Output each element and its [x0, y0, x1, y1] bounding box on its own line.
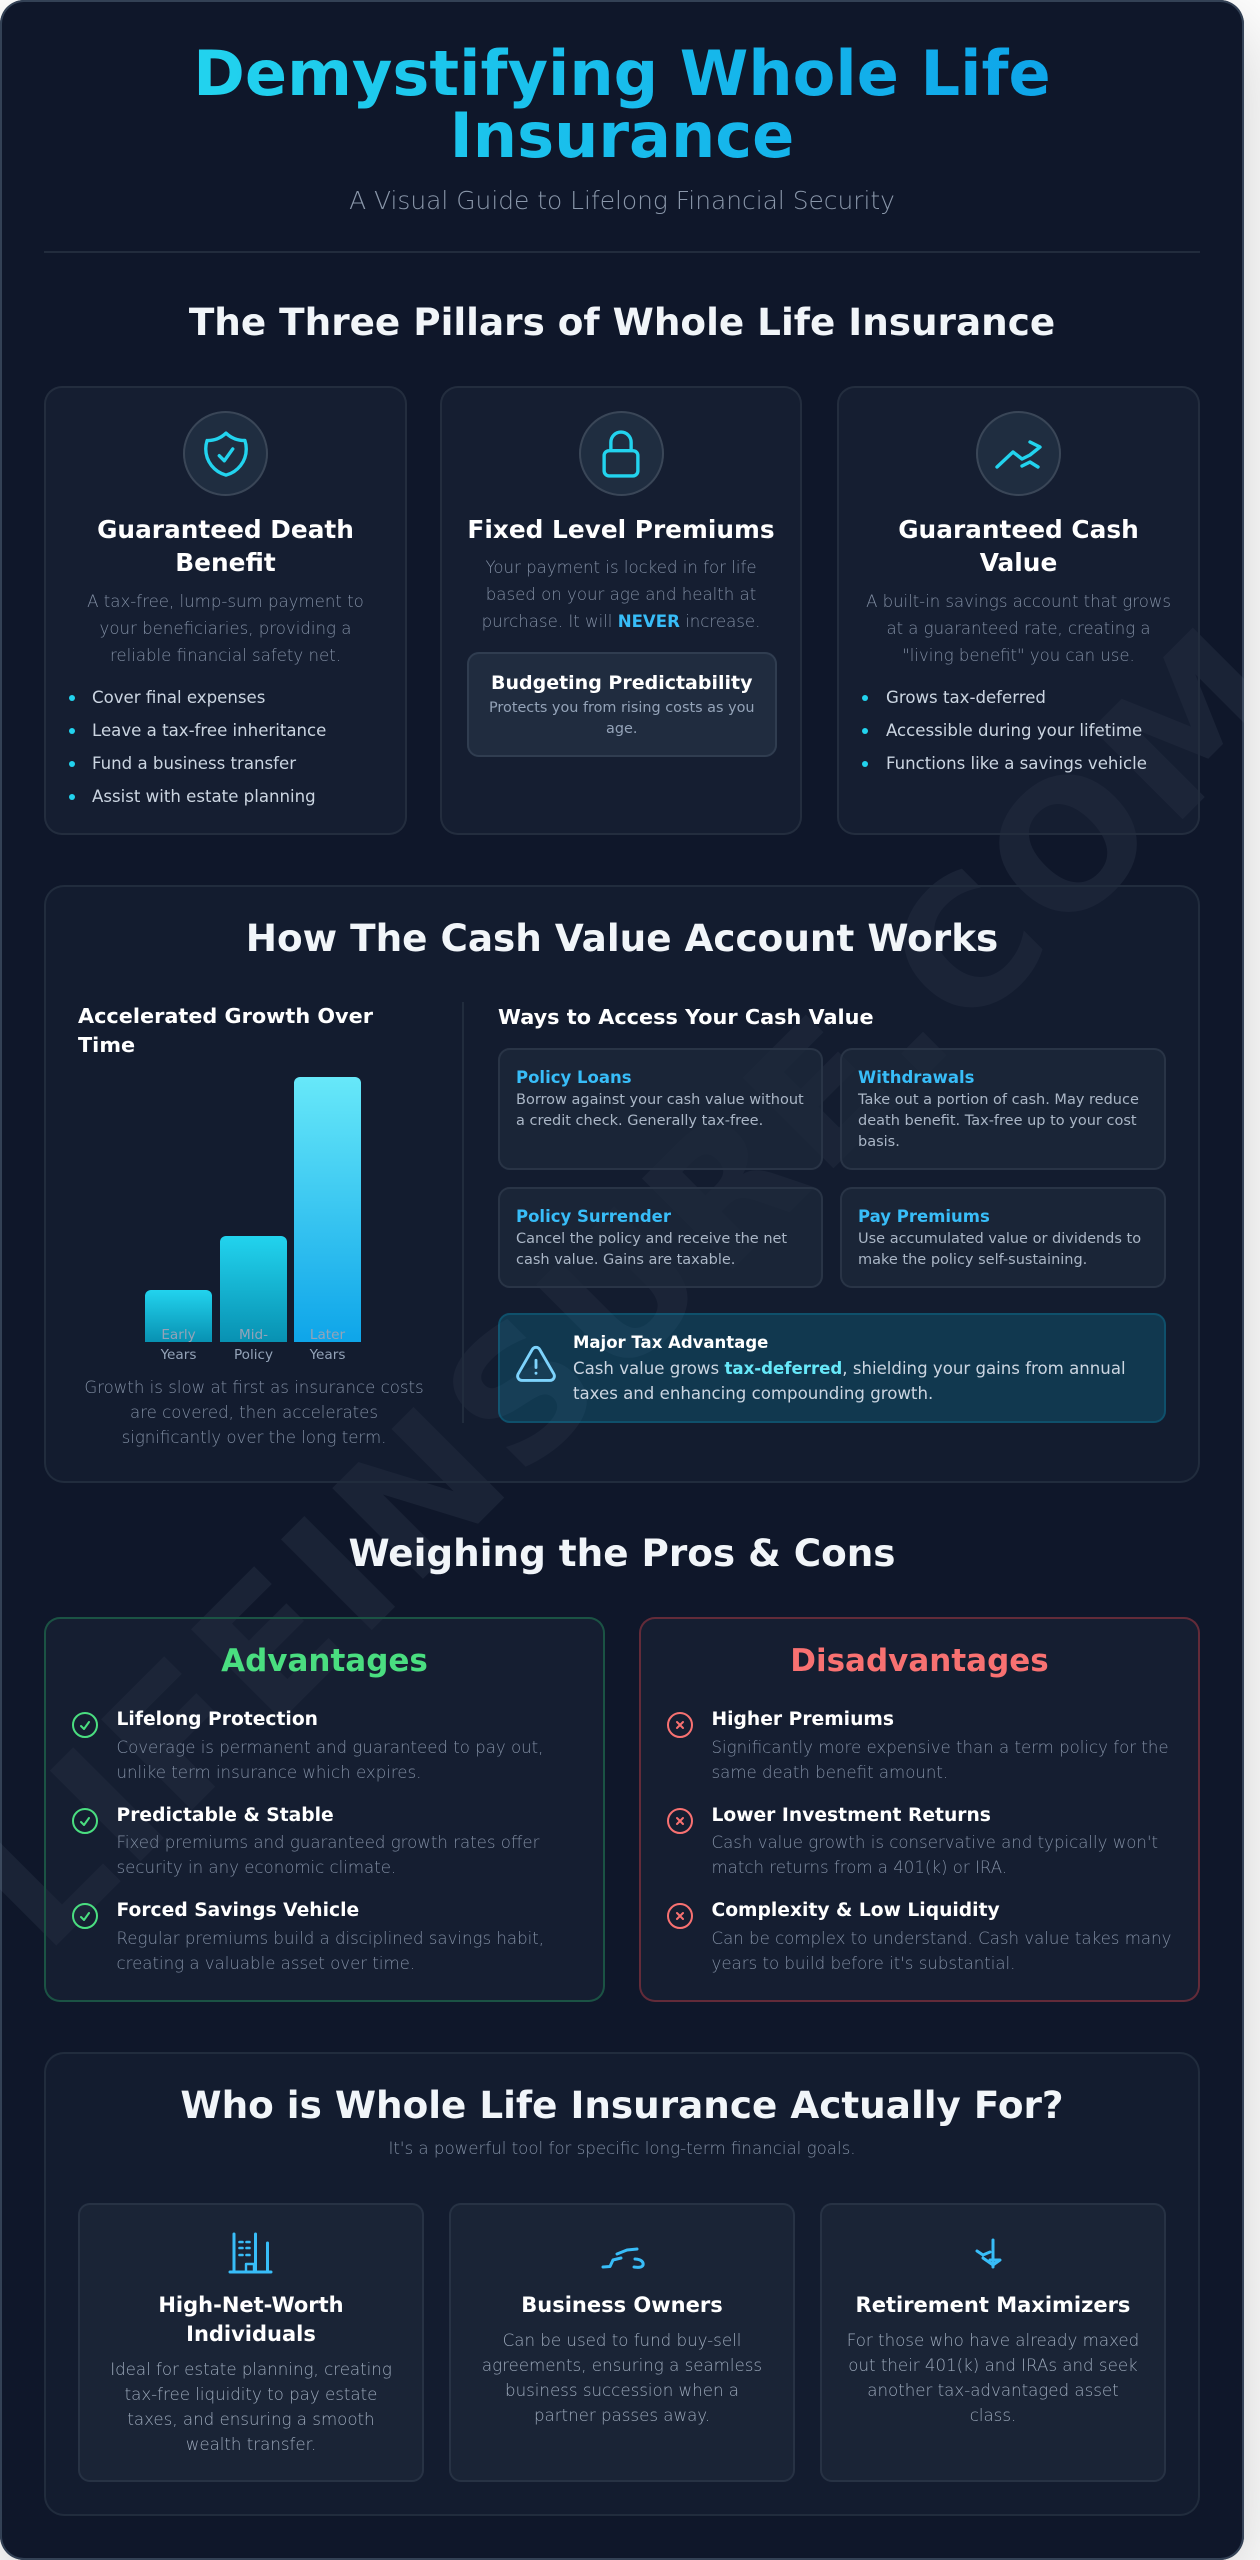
card: policy surrender: Cancel the policy and receive the net: [516, 1231, 787, 1247]
callout title: Budgeting Predictability: [491, 672, 752, 694]
panel: disadvantages: [639, 1617, 1200, 2002]
item: predictable and stable: Predictable & Stable: [116, 1804, 334, 1826]
icon: arrow: [975, 2238, 1002, 2268]
card title: Guaranteed Cash: [898, 514, 1139, 544]
card: withdrawals: death benefit. Tax-free up to your cost: [858, 1113, 1137, 1129]
icon: chart trend: [976, 411, 1061, 496]
card: pay premiums: make the policy self-sustaining.: [858, 1252, 1087, 1268]
card title: Retirement Maximizers: [856, 2292, 1130, 2316]
item: lifelong protection: [72, 1709, 543, 1782]
card: pay premiums: Use accumulated value or dividends to: [858, 1231, 1141, 1247]
card: pay premiums: [840, 1187, 1166, 1288]
item: predictable and stable: [72, 1804, 540, 1877]
bar chart: Later: [310, 1327, 345, 1343]
card: withdrawals: Withdrawals: [858, 1068, 974, 1086]
callout text: [489, 700, 755, 736]
card description: based on your age and health at: [486, 585, 756, 604]
item: complexity and low liquidity: Can be complex to understand. Cash value takes many: [712, 1928, 1171, 1948]
panel: guaranteed death benefit: [44, 386, 407, 835]
card text: partner passes away.: [534, 2406, 710, 2424]
panel: fixed level premiums: [440, 386, 802, 835]
item: lifelong protection: Lifelong Protection: [116, 1709, 318, 1730]
heading: Who is Whole Life Insurance Actually For?: [180, 2083, 1064, 2127]
chart caption: Growth is slow at first as insurance costs: [84, 1378, 424, 1396]
benefit list: Accessible during your lifetime: [886, 721, 1142, 740]
card description: A built-in savings account that grows: [866, 592, 1171, 611]
card title: Business Owners: [521, 2292, 723, 2316]
card title: Fixed Level Premiums: [467, 514, 775, 544]
card: policy loans: Policy Loans: [516, 1068, 632, 1086]
subheading: It's a powerful tool for specific long-term financial goals.: [388, 2138, 856, 2158]
card: policy loans: [498, 1048, 823, 1170]
card title: Benefit: [175, 548, 276, 576]
bar chart: Years: [310, 1347, 345, 1363]
item: higher premiums: same death benefit amount.: [712, 1762, 948, 1782]
card text: business succession when a: [505, 2380, 739, 2400]
icon: shield: [183, 411, 268, 496]
item: forced savings vehicle: Forced Savings Vehicle: [116, 1900, 359, 1921]
card description: "living benefit" you can use.: [902, 646, 1135, 665]
card title: Individuals: [186, 2322, 316, 2346]
card: policy surrender: [498, 1187, 823, 1288]
panel: advantages: [44, 1617, 605, 2002]
card text: [482, 2330, 762, 2424]
item: higher premiums: Significantly more expensive than a term policy for the: [712, 1738, 1169, 1756]
card: withdrawals: [840, 1048, 1166, 1170]
item: lower investment returns: Lower Investment Returns: [712, 1804, 991, 1826]
benefit list: Cover final expenses: [92, 688, 265, 707]
callout text: age.: [606, 720, 637, 736]
card description: [866, 592, 1171, 665]
panel: guaranteed cash value: [837, 386, 1200, 835]
subtitle: A Visual Guide to Lifelong Financial Security: [349, 186, 895, 215]
card title: [898, 514, 1139, 576]
benefit list: Functions like a savings vehicle: [886, 754, 1147, 773]
card text: out their 401(k) and IRAs and seek: [848, 2356, 1138, 2374]
card description: [87, 592, 364, 665]
card: retirement maximizers: [820, 2203, 1166, 2482]
item: lower investment returns: match returns from a 401(k) or IRA.: [712, 1858, 1007, 1877]
icon: warning: [516, 1346, 556, 1382]
item: complexity and low liquidity: Complexity & Low Liquidity: [712, 1900, 1000, 1921]
heading: ways to access: Ways to Access Your Cash Value: [498, 1005, 874, 1029]
panel title: Advantages: [221, 1643, 428, 1679]
card description: your beneficiaries, providing a: [100, 619, 351, 638]
card title: High-Net-Worth: [158, 2292, 344, 2316]
callout text: Protects you from rising costs as you: [489, 700, 755, 716]
item: higher premiums: [667, 1709, 1169, 1782]
card: policy loans: Borrow against your cash value without: [516, 1092, 804, 1108]
panel: how the cash value account works: [44, 885, 1200, 1483]
card text: agreements, ensuring a seamless: [482, 2356, 762, 2374]
bar chart: Years: [161, 1347, 196, 1363]
item: complexity and low liquidity: years to build before it's substantial.: [712, 1954, 1015, 1972]
chart caption: significantly over the long term.: [122, 1428, 386, 1446]
bar chart: Mid-: [239, 1327, 268, 1343]
card text: another tax-advantaged asset: [867, 2380, 1119, 2400]
card: policy surrender: Policy Surrender: [516, 1206, 671, 1226]
card: pay premiums: Pay Premiums: [858, 1206, 990, 1226]
panel: who is it for: [44, 2052, 1200, 2516]
chart title: Accelerated Growth Over: [78, 1004, 373, 1028]
callout title: Major Tax Advantage: [573, 1333, 768, 1352]
benefit list: Assist with estate planning: [92, 787, 316, 806]
item: lifelong protection: unlike term insurance which expires.: [116, 1762, 421, 1782]
benefit list: Fund a business transfer: [92, 754, 296, 773]
card: business owners: [449, 2203, 795, 2482]
chart column: [78, 1004, 424, 1446]
card description: A tax-free, lump-sum payment to: [87, 592, 364, 611]
item: forced savings vehicle: Regular premiums build a disciplined savings habit,: [116, 1928, 544, 1948]
icon: lock: [578, 411, 664, 496]
item: lifelong protection: Coverage is permanent and guaranteed to pay out,: [116, 1738, 543, 1756]
card text: [847, 2330, 1139, 2424]
item: lower investment returns: [667, 1804, 1158, 1877]
benefit list: Leave a tax-free inheritance: [92, 721, 326, 740]
card description: reliable financial safety net.: [110, 646, 341, 665]
chart title: Time: [78, 1033, 135, 1057]
title: [193, 42, 1051, 168]
card text: Can be used to fund buy-sell: [503, 2330, 741, 2350]
callout text: taxes and enhancing compounding growth.: [573, 1384, 933, 1402]
benefit list: Grows tax-deferred: [886, 688, 1046, 707]
item: complexity and low liquidity: [667, 1900, 1171, 1972]
icon: handshake: [602, 2248, 645, 2269]
icon: building: [228, 2232, 272, 2274]
item: forced savings vehicle: [72, 1900, 544, 1972]
item: lower investment returns: Cash value growth is conservative and typically won't: [712, 1833, 1158, 1852]
card: policy loans: a credit check. Generally tax-free.: [516, 1113, 763, 1129]
bar chart: Early: [161, 1327, 196, 1343]
card: withdrawals: Take out a portion of cash. May reduce: [858, 1092, 1139, 1108]
card text: Ideal for estate planning, creating: [110, 2360, 392, 2378]
title: Insurance: [450, 99, 794, 172]
card: policy surrender: cash value. Gains are taxable.: [516, 1252, 735, 1268]
card: withdrawals: basis.: [858, 1134, 900, 1150]
item: predictable and stable: Fixed premiums and guaranteed growth rates offer: [116, 1833, 539, 1852]
card title: [158, 2292, 344, 2346]
item: higher premiums: Higher Premiums: [712, 1709, 894, 1730]
card: high-net-worth individuals: [78, 2203, 424, 2482]
card title: Value: [980, 548, 1057, 576]
chart title: [78, 1004, 373, 1057]
card description: [482, 558, 760, 631]
card description: purchase. It will NEVER increase.: [482, 612, 760, 631]
benefit list: [862, 688, 1147, 773]
card text: taxes, and ensuring a smooth: [127, 2410, 375, 2428]
card text: [110, 2360, 392, 2454]
card title: Guaranteed Death: [97, 514, 354, 544]
panel title: Disadvantages: [790, 1643, 1049, 1679]
callout: major tax advantage: [498, 1313, 1166, 1423]
heading: pros and cons: Weighing the Pros & Cons: [348, 1531, 896, 1575]
bar chart: [145, 1077, 361, 1363]
chart caption: are covered, then accelerates: [130, 1402, 378, 1422]
chart caption: [84, 1378, 424, 1446]
item: predictable and stable: security in any economic climate.: [116, 1858, 396, 1877]
bar chart: Policy: [234, 1347, 273, 1363]
card text: class.: [970, 2406, 1016, 2424]
benefit list: [69, 688, 326, 806]
title: Demystifying Whole Life: [193, 36, 1051, 110]
card text: For those who have already maxed: [847, 2330, 1139, 2350]
heading: How The Cash Value Account Works: [246, 916, 998, 960]
card text: tax-free liquidity to pay estate: [125, 2384, 377, 2404]
item: forced savings vehicle: creating a valuable asset over time.: [116, 1954, 415, 1972]
card description: Your payment is locked in for life: [485, 558, 757, 577]
card description: at a guaranteed rate, creating a: [886, 619, 1151, 638]
heading: three pillars: The Three Pillars of Whole Life Insurance: [189, 300, 1055, 344]
callout text: Cash value grows tax-deferred, shielding your gains from annual: [573, 1358, 1126, 1378]
card text: wealth transfer.: [186, 2434, 316, 2454]
callout text: [573, 1358, 1126, 1402]
callout: budgeting predictability: [466, 652, 777, 757]
card title: [97, 514, 354, 576]
